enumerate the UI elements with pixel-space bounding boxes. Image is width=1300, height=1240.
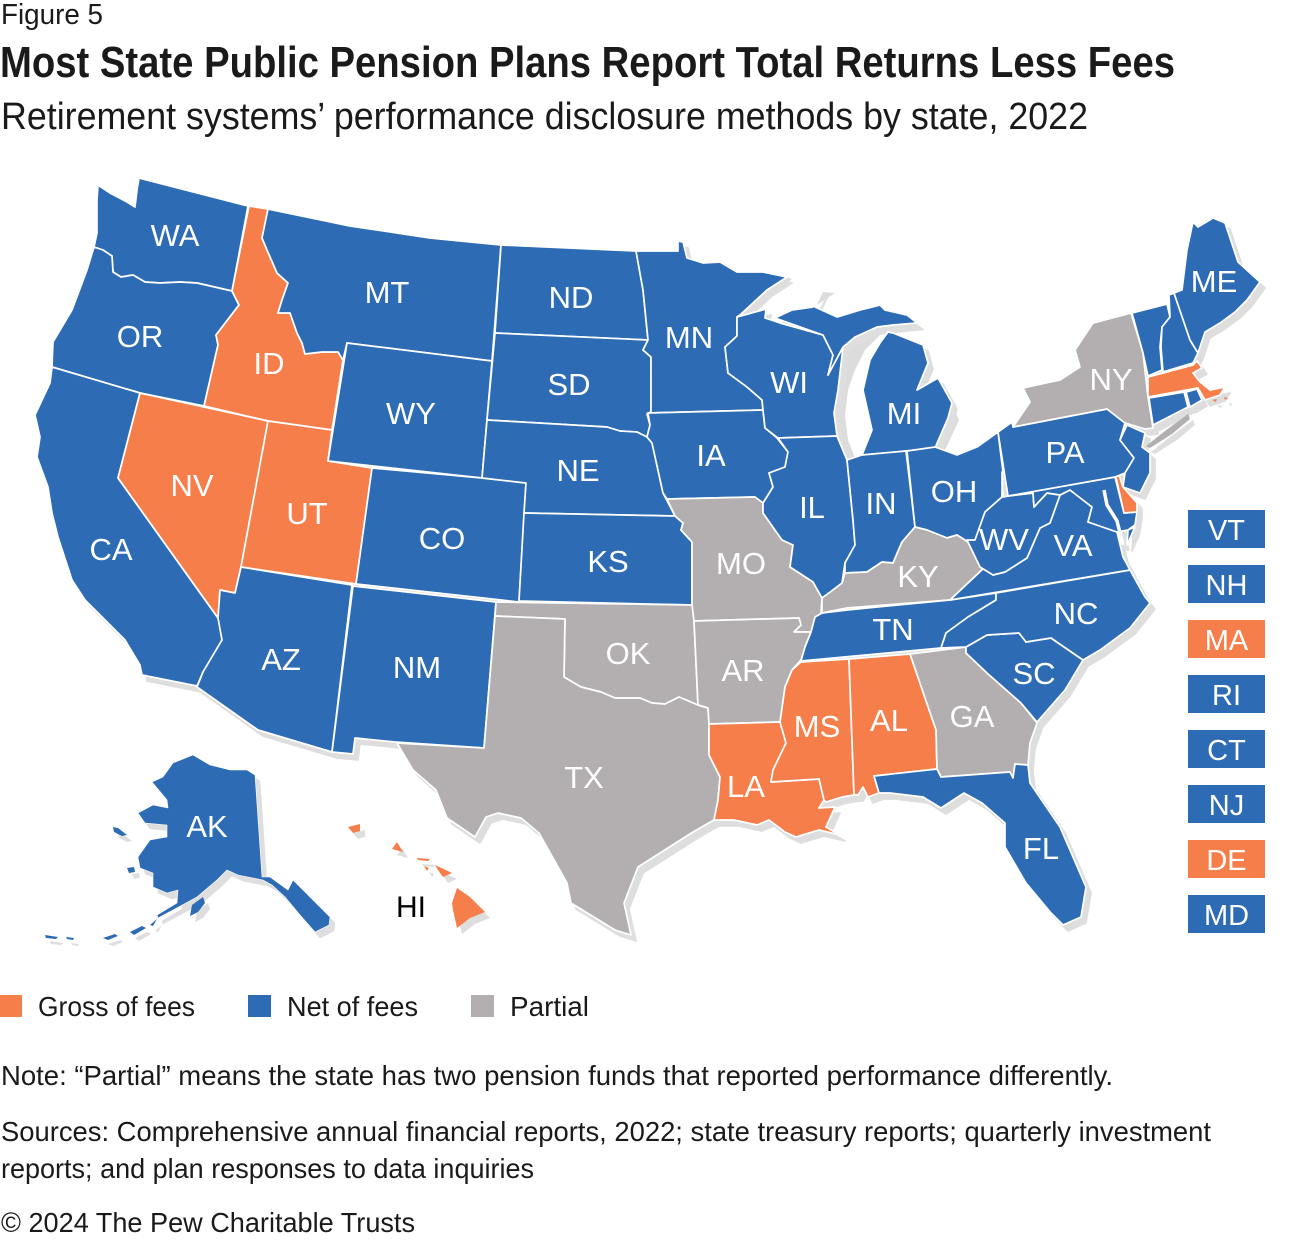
state: MI: MI — [887, 396, 921, 431]
state: VA: VA — [1053, 528, 1093, 563]
small-state key: VT: VT — [1208, 515, 1245, 547]
legend — [0, 991, 589, 1022]
state: TN: TN — [872, 612, 914, 647]
sources: Sources: Comprehensive annual financial reports, 2022; state treasury reports; quarterly investment — [1, 1116, 1211, 1147]
state: MO: MO — [716, 546, 766, 581]
state: NV — [118, 393, 268, 618]
state: MI upper peninsula — [775, 290, 917, 375]
state: WA: WA — [151, 218, 200, 253]
state: LA — [709, 722, 840, 837]
small-state key: NH — [1188, 565, 1265, 603]
subtitle: Retirement systems’ performance disclosure methods by state, 2022 — [1, 96, 1088, 138]
state: SC — [966, 633, 1083, 722]
state: WA — [94, 178, 248, 291]
state: MN — [636, 241, 787, 413]
state: OK: OK — [606, 636, 651, 671]
state: CA — [35, 367, 222, 686]
state: NE — [482, 420, 675, 516]
state: SD: SD — [547, 367, 591, 402]
state: VA eastern shore — [1127, 527, 1135, 545]
legend item: partial: Partial — [510, 991, 589, 1022]
small-state key: RI — [1188, 675, 1265, 713]
state: SC: SC — [1012, 656, 1056, 691]
Great Lakes shore shadows — [740, 277, 959, 462]
small-state key: CT: CT — [1207, 735, 1246, 767]
state: HI — [348, 824, 485, 928]
state: TN — [801, 593, 996, 661]
state: CT — [1149, 392, 1188, 425]
state: NH — [1161, 293, 1198, 372]
state: IN: IN — [866, 486, 896, 521]
state: MS: MS — [794, 709, 840, 744]
state: DE — [1115, 473, 1137, 513]
state: TX: TX — [564, 760, 604, 795]
state: ID — [204, 206, 343, 430]
legend item: net of fees: Net of fees — [287, 991, 418, 1022]
state: WV: WV — [979, 522, 1029, 557]
state: PA: PA — [1045, 435, 1085, 470]
state: ME: ME — [1191, 264, 1237, 299]
state: IA: IA — [696, 438, 726, 473]
state: OH — [907, 432, 1003, 542]
state: WY: WY — [386, 396, 436, 431]
small-state key: MA — [1188, 620, 1265, 658]
state: OR — [52, 247, 239, 406]
state: UT — [241, 421, 372, 584]
map: contiguous states, Alaska and Hawaii — [35, 178, 1260, 940]
state: IN — [845, 451, 915, 573]
state: NJ — [1120, 425, 1150, 493]
state: GA: GA — [950, 699, 995, 734]
copyright: © 2024 The Pew Charitable Trusts — [1, 1207, 415, 1238]
state: NM: NM — [393, 650, 441, 685]
state: KS: KS — [587, 544, 629, 579]
sources: reports; and plan responses to data inquiries — [1, 1153, 534, 1184]
state: IA — [647, 410, 788, 503]
state: NC — [941, 570, 1150, 660]
small-state key: NH: NH — [1206, 570, 1247, 602]
small-state key: MD — [1188, 895, 1265, 933]
state: WV — [967, 472, 1060, 575]
state: NE: NE — [556, 453, 600, 488]
state: ND — [495, 245, 648, 340]
state: ID: ID — [254, 346, 284, 381]
state: PA — [998, 409, 1134, 496]
state: MO — [667, 497, 822, 632]
state: AK: AK — [186, 809, 228, 844]
state: NM — [332, 586, 496, 754]
small-state key: RI: RI — [1212, 680, 1241, 712]
state: CA: CA — [89, 532, 133, 567]
state: VA — [950, 490, 1130, 600]
small-state key: VT — [1188, 510, 1265, 548]
state: AR — [694, 618, 811, 724]
state: UT: UT — [286, 496, 328, 531]
state: OR: OR — [117, 319, 163, 354]
state: VT — [1132, 304, 1170, 376]
small-state key: MD: MD — [1204, 900, 1249, 932]
state: NY Long Island — [1146, 414, 1190, 448]
state: NY — [1013, 313, 1153, 429]
state: KS — [519, 513, 692, 605]
state: AK — [45, 755, 330, 940]
state: NV: NV — [170, 468, 214, 503]
state: ME — [1174, 218, 1260, 353]
note: Note: “Partial” means the state has two pension funds that reported performance differently. — [1, 1060, 1113, 1091]
state: LA: LA — [727, 769, 765, 804]
state: CO — [356, 468, 526, 602]
state: NC: NC — [1054, 596, 1098, 631]
state: IL — [763, 436, 855, 598]
state: FL — [874, 764, 1086, 925]
state: AZ: AZ — [261, 642, 301, 677]
state: MT: MT — [365, 275, 409, 310]
state: MN: MN — [665, 320, 713, 355]
state: CO: CO — [419, 521, 465, 556]
Hawaii label: HI — [396, 891, 426, 924]
state: MD — [1008, 477, 1137, 545]
state: KY — [822, 527, 985, 613]
state: AR: AR — [721, 653, 765, 688]
state: NY: NY — [1089, 362, 1133, 397]
legend item: gross of fees: Gross of fees — [38, 991, 195, 1022]
small-state key: NJ — [1188, 785, 1265, 823]
state: AZ — [197, 567, 352, 752]
small-state key: DE: DE — [1206, 845, 1247, 877]
small-state key: MA: MA — [1205, 625, 1249, 657]
sources — [1, 1116, 1211, 1184]
state: MI — [862, 332, 952, 455]
state: AL — [849, 654, 937, 797]
small-state key: NJ: NJ — [1209, 790, 1244, 822]
state: RI — [1186, 389, 1202, 407]
small-state key: CT — [1188, 730, 1265, 768]
legend item: partial — [471, 991, 589, 1022]
state: MT — [262, 209, 501, 361]
state: WY — [328, 343, 492, 478]
state: TX — [397, 616, 720, 935]
state: IL: IL — [799, 490, 825, 525]
state: WI: WI — [770, 365, 808, 400]
state: WI — [725, 309, 843, 438]
small-state key: DE — [1188, 840, 1265, 878]
state: OK — [495, 602, 698, 705]
state: MS — [771, 659, 854, 802]
state: AL: AL — [870, 703, 908, 738]
state: GA — [910, 647, 1037, 778]
state: FL: FL — [1023, 831, 1059, 866]
state: KY: KY — [897, 559, 939, 594]
state: SD — [487, 333, 651, 437]
state: ND: ND — [549, 280, 593, 315]
state: OH: OH — [931, 474, 977, 509]
state: MA — [1148, 361, 1228, 402]
